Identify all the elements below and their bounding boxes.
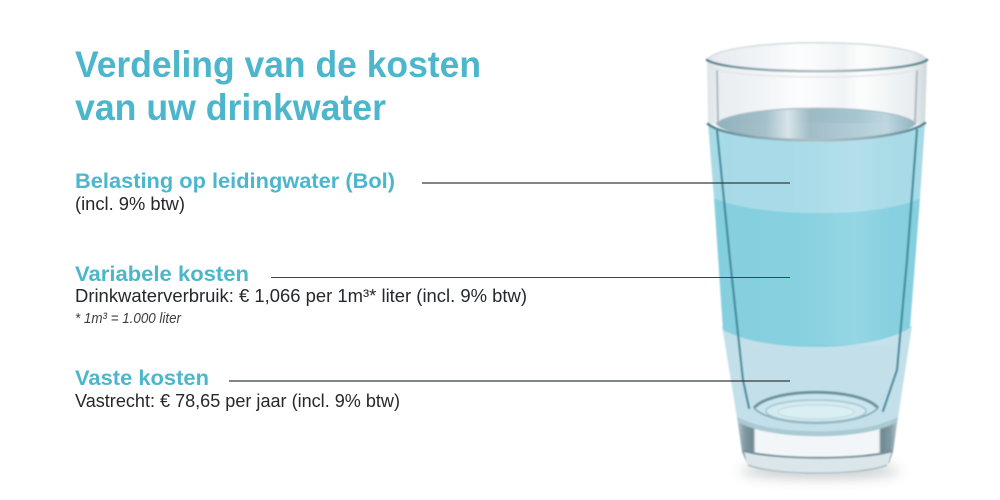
text block: Belasting op leidingwater xyxy=(75,169,395,214)
water surface xyxy=(716,108,916,140)
text block: Vaste kosten: Vaste kosten xyxy=(75,366,209,390)
water band: top section xyxy=(708,123,925,213)
text block: Variabele kosten: Drinkwaterverbruik: € 1,066 per 1m³* liter (incl. 9% btw) xyxy=(75,286,527,306)
glass of water xyxy=(707,43,927,478)
water band: pale bottom section xyxy=(722,326,912,432)
glass floor xyxy=(754,392,878,424)
text block: Variabele kosten: * 1m³ = 1.000 liter xyxy=(75,310,182,327)
glass shadow xyxy=(740,464,900,478)
light sheen xyxy=(708,123,925,345)
leader line: Variabele kosten xyxy=(271,276,790,278)
water band: variable section xyxy=(714,198,920,347)
text block: Belasting op leidingwater: (incl. 9% btw) xyxy=(75,194,185,214)
title: Verdeling van de kosten xyxy=(75,44,481,85)
title: van uw drinkwater xyxy=(75,87,386,128)
text block: Vaste kosten xyxy=(75,366,400,411)
text block: Vaste kosten: Vastrecht: € 78,65 per jaar (incl. 9% btw) xyxy=(75,391,400,411)
text block: Variabele kosten: Variabele kosten xyxy=(75,262,249,286)
glass foot xyxy=(737,417,898,474)
glass walls xyxy=(707,43,927,411)
title xyxy=(75,44,481,128)
leader line: Vaste kosten xyxy=(229,380,790,382)
glass upper empty part xyxy=(707,43,927,124)
text block: Belasting op leidingwater: Belasting op leidingwater (Bol) xyxy=(75,169,395,193)
leader line: Belasting op leidingwater xyxy=(422,182,790,184)
text block: Variabele kosten xyxy=(75,262,527,327)
